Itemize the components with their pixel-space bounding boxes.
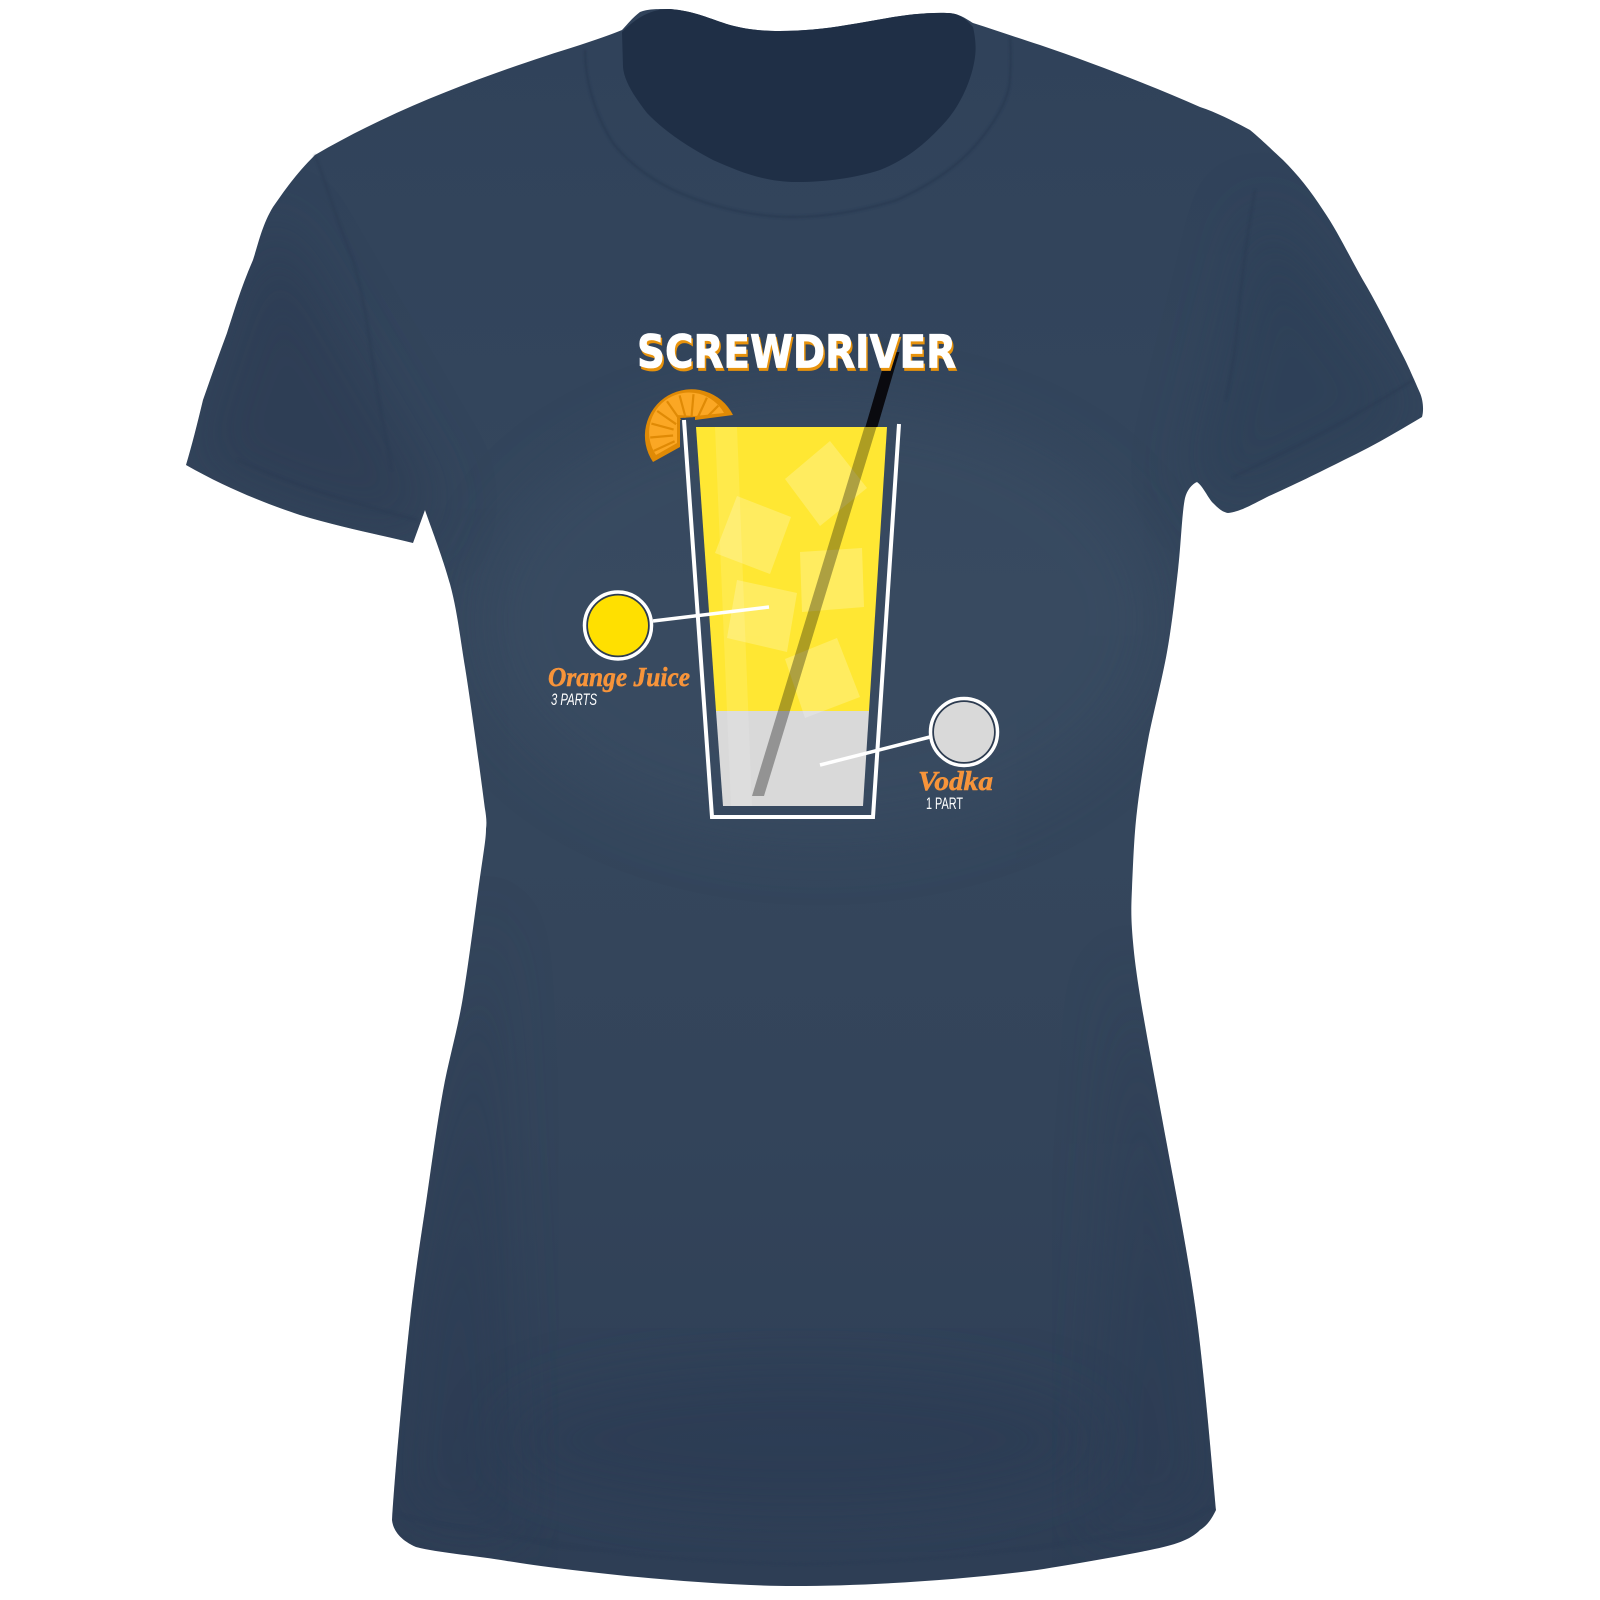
vodka layer	[716, 711, 869, 806]
t-shirt	[186, 9, 1423, 1586]
title shadow: SCREWDRIVER	[638, 328, 958, 382]
swatch ring	[930, 698, 998, 766]
callout: orange juice	[548, 592, 769, 709]
fabric shading	[186, 200, 1422, 1540]
segment dividers	[650, 394, 718, 451]
ingredient name: Orange Juice	[548, 662, 690, 692]
swatch colour	[588, 596, 648, 656]
ice cubes	[715, 441, 867, 718]
swatch ring	[584, 592, 652, 659]
leader line	[653, 607, 769, 621]
ice cube 1	[785, 441, 867, 526]
leader line	[820, 737, 930, 765]
glass outline	[684, 420, 899, 817]
ingredient amount: 1 PART	[926, 794, 963, 813]
title text: SCREWDRIVER	[637, 326, 956, 378]
straw above the liquid	[864, 352, 899, 430]
straw in the drink	[752, 427, 876, 796]
ice cube 5	[785, 638, 860, 718]
swatch colour	[934, 702, 994, 762]
title	[637, 326, 958, 382]
glass highlight	[715, 427, 752, 806]
collar stitching	[585, 38, 1011, 217]
shoulder and hem seams	[237, 155, 1413, 1564]
flesh	[649, 393, 724, 455]
ingredient name: Vodka	[918, 766, 993, 796]
inside of neck	[622, 9, 976, 182]
cocktail infographic	[548, 326, 998, 817]
callout: vodka	[820, 698, 998, 813]
rind	[645, 389, 733, 462]
ice cube 3	[800, 548, 864, 612]
shirt body	[186, 9, 1423, 1586]
orange slice garnish	[645, 389, 733, 462]
ice cube 4	[727, 580, 797, 652]
juice layer	[696, 427, 887, 711]
ingredient amount: 3 PARTS	[551, 690, 597, 709]
ice cube 2	[715, 496, 791, 574]
